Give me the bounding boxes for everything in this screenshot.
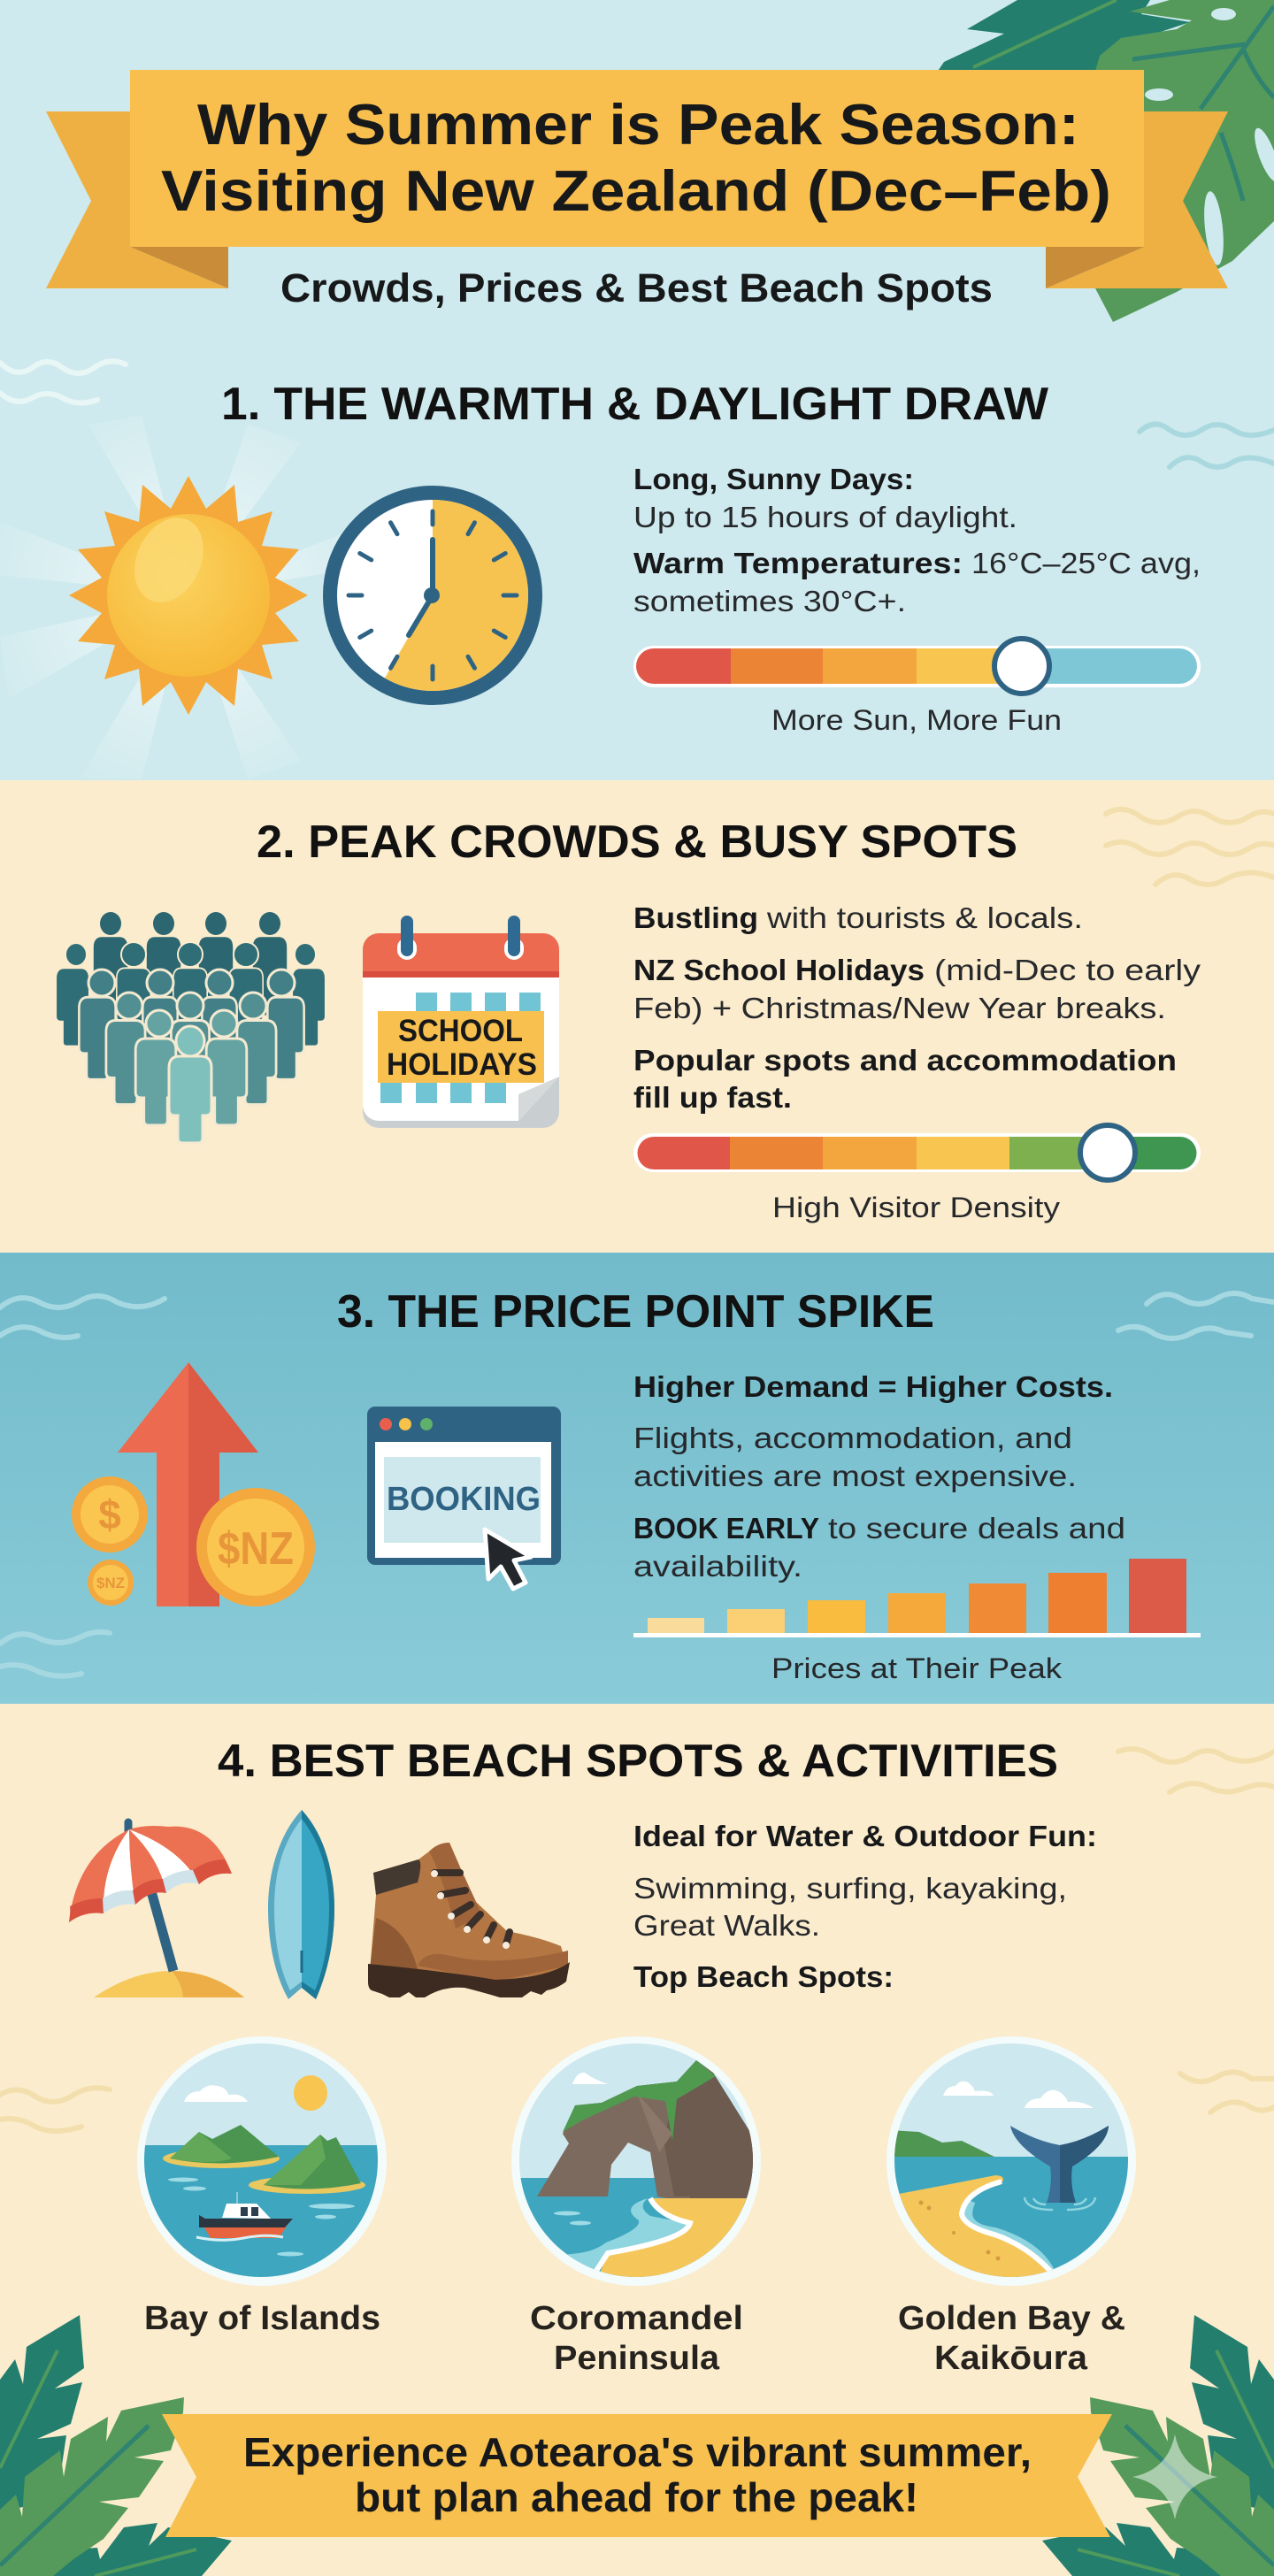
caption: visitor density: High Visitor Density (772, 1192, 1060, 1223)
icon: crowd (56, 912, 326, 1143)
subtitle: Crowds, Prices & Best Beach Spots (280, 265, 993, 310)
footer message: Experience Aotearoa's vibrant summer, (243, 2429, 1032, 2475)
label: school holidays: HOLIDAYS (387, 1047, 537, 1082)
panel: beach spots and activities (0, 1704, 1274, 2576)
spot: Bay of Islands (137, 2036, 387, 2286)
text: daylight and temperature: Up to 15 hours of daylight. (633, 501, 1017, 533)
decorative bottom-right leaves (1042, 2315, 1274, 2576)
title banner (46, 70, 1228, 288)
icon: large NZ coin: $NZ (218, 1523, 294, 1575)
label: Coromandel Peninsula: Peninsula (554, 2340, 720, 2377)
icon: sun (0, 416, 372, 779)
text: price details: availability. (633, 1550, 802, 1583)
icon: dollar coin: $ (98, 1491, 121, 1537)
footer message: but plan ahead for the peak! (355, 2474, 918, 2520)
label: booking: BOOKING (387, 1481, 541, 1518)
text: crowds details: Bustling (633, 901, 758, 934)
text: price details: BOOK EARLY (633, 1512, 819, 1545)
title: Visiting New Zealand (Dec–Feb) (161, 158, 1111, 223)
icon: school holidays calendar (363, 916, 559, 1128)
footer banner (162, 2414, 1112, 2537)
label: Golden Bay and Kaikoura: Golden Bay & (898, 2300, 1125, 2337)
icon: small NZ coin: $NZ (96, 1575, 125, 1591)
text: daylight and temperature: sometimes 30°C+. (633, 585, 906, 617)
title (161, 92, 1111, 223)
text: crowds details: Feb) + Christmas/New Year breaks. (633, 992, 1166, 1024)
text: crowds details (633, 901, 1201, 1114)
text: crowds details: (mid-Dec to early (934, 954, 1201, 986)
heading 4: 4. BEST BEACH SPOTS & ACTIVITIES (218, 1736, 1058, 1787)
panel: price spike (0, 1253, 1274, 1704)
text: activities: Great Walks. (633, 1909, 820, 1942)
caption: more sun: More Sun, More Fun (771, 704, 1062, 736)
slider: visitor density (633, 1125, 1201, 1180)
icon: dollar coin (72, 1476, 148, 1552)
text: crowds details: with tourists & locals. (766, 901, 1083, 934)
label: school holidays: SCHOOL (398, 1014, 523, 1048)
decorative bottom-left leaves (0, 2315, 232, 2576)
label: Bay of Islands: Bay of Islands (144, 2300, 380, 2337)
icon: surfboard (268, 1810, 334, 1999)
footer message (243, 2429, 1032, 2520)
icon: beach umbrella (69, 1822, 244, 1997)
icon: large NZ coin (196, 1488, 315, 1606)
icon: hiking boot (368, 1843, 570, 1997)
text: activities: Ideal for Water & Outdoor Fun: (633, 1820, 1097, 1852)
icon: small NZ coin (88, 1560, 134, 1606)
decorative top-right monstera leaves (929, 0, 1274, 322)
text: price details: activities are most expensive. (633, 1460, 1077, 1492)
text: daylight and temperature: Long, Sunny Days: (633, 463, 914, 495)
label: Coromandel Peninsula: Coromandel (530, 2300, 743, 2337)
text: price details: Flights, accommodation, and (633, 1422, 1072, 1454)
spot: Coromandel Peninsula (511, 2036, 770, 2291)
panel: warmth and daylight (0, 0, 1274, 780)
panel: peak crowds (0, 780, 1274, 1253)
heading 1: 1. THE WARMTH & DAYLIGHT DRAW (221, 379, 1049, 430)
icon: clock (330, 493, 535, 698)
icon: sparkle mark (1132, 2434, 1217, 2519)
text: daylight and temperature: Warm Temperatures: (633, 547, 963, 579)
icon: rising price arrow and coins (72, 1362, 315, 1606)
label: Golden Bay and Kaikoura: Kaikōura (934, 2340, 1088, 2377)
text: crowds details: fill up fast. (633, 1081, 792, 1114)
slider: more sun (633, 639, 1201, 694)
label: Golden Bay and Kaikoura (898, 2300, 1125, 2377)
spot: Golden Bay and Kaikoura (886, 2036, 1137, 2300)
heading 2: 2. PEAK CROWDS & BUSY SPOTS (257, 816, 1017, 868)
text: crowds details: Popular spots and accommodation (633, 1044, 1177, 1077)
text: activities (633, 1820, 1097, 1993)
label: school holidays (387, 1014, 537, 1082)
text: price details (633, 1370, 1125, 1583)
title: Why Summer is Peak Season: (197, 92, 1079, 157)
bar chart: prices (633, 1559, 1201, 1637)
text: activities: Top Beach Spots: (633, 1960, 894, 1993)
icon: booking window (367, 1407, 561, 1589)
caption: prices: Prices at Their Peak (771, 1652, 1063, 1684)
text: daylight and temperature (633, 463, 1201, 617)
text: price details: Higher Demand = Higher Costs. (633, 1370, 1113, 1403)
text: crowds details: NZ School Holidays (633, 954, 925, 986)
icon: cursor (485, 1530, 531, 1589)
heading 3: 3. THE PRICE POINT SPIKE (337, 1286, 934, 1338)
text: activities: Swimming, surfing, kayaking, (633, 1872, 1067, 1905)
text: daylight and temperature: 16°C–25°C avg, (971, 547, 1201, 579)
label: Coromandel Peninsula (530, 2300, 743, 2377)
text: price details: to secure deals and (828, 1512, 1125, 1545)
